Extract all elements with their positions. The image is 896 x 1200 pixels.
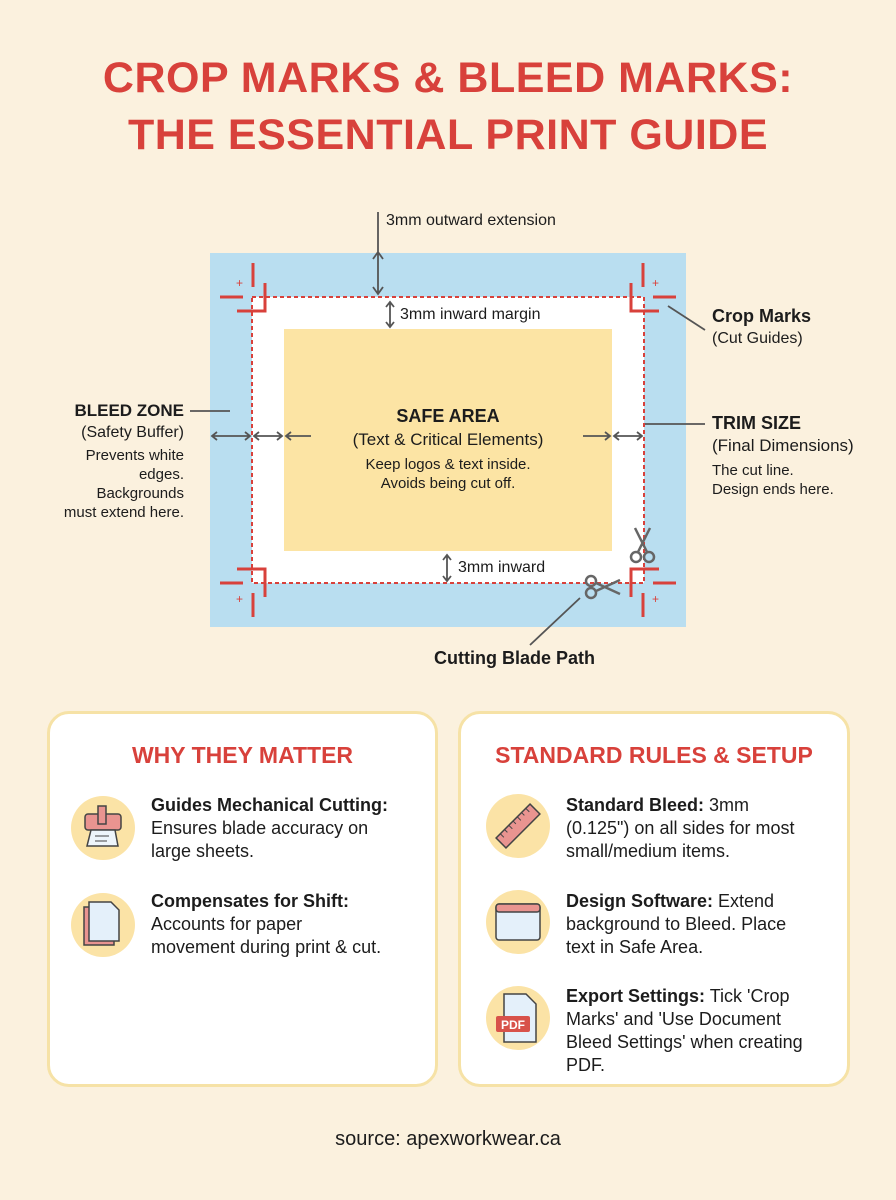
label: trim size: The cut line. xyxy=(712,462,794,479)
label: crop marks: Crop Marks xyxy=(712,306,811,326)
text: compensates for shift: movement during print & cut. xyxy=(151,937,381,957)
label: bleed zone: Prevents white xyxy=(86,447,184,464)
text: compensates for shift xyxy=(151,891,381,957)
panel: why they matter xyxy=(47,711,438,1087)
icon: cutter xyxy=(71,796,135,860)
label: trim size: (Final Dimensions) xyxy=(712,436,854,455)
panel: standard rules xyxy=(458,711,850,1087)
bleed zone xyxy=(210,253,686,627)
text: compensates for shift: Compensates for Shift: xyxy=(151,891,349,911)
crop marks xyxy=(220,263,676,617)
title: CROP MARKS & BLEED MARKS: xyxy=(103,54,793,102)
text: design software: Design Software: Extend xyxy=(566,891,774,911)
dimension labels: 3mm outward extension xyxy=(386,212,556,229)
icon: paper xyxy=(71,893,135,957)
icon: ruler xyxy=(486,794,550,858)
safe area: Avoids being cut off. xyxy=(381,475,515,492)
panel: why they matter: WHY THEY MATTER xyxy=(132,742,353,768)
text: design software: text in Safe Area. xyxy=(566,937,703,957)
diagram xyxy=(190,212,706,646)
label: trim size: Design ends here. xyxy=(712,481,834,498)
text: standard bleed: (0.125") on all sides for most xyxy=(566,818,794,838)
label: trim size: TRIM SIZE xyxy=(712,413,801,433)
icon: scissors xyxy=(586,528,654,598)
text: standard bleed: Standard Bleed: 3mm xyxy=(566,795,749,815)
safe area: (Text & Critical Elements) xyxy=(353,430,543,449)
text: guides mechanical cutting: Guides Mechanical Cutting: xyxy=(151,795,388,815)
label: bleed zone: (Safety Buffer) xyxy=(81,424,184,441)
label: cutting blade path: Cutting Blade Path xyxy=(434,648,595,668)
diagram: + xyxy=(236,276,243,290)
arrows xyxy=(190,212,705,645)
safe area xyxy=(284,329,612,551)
text: guides mechanical cutting xyxy=(151,795,388,861)
safe area: SAFE AREA xyxy=(396,406,500,426)
label: bleed zone: Backgrounds xyxy=(96,485,184,502)
diagram: 3mm inward xyxy=(458,559,545,576)
diagram: 3mm inward margin xyxy=(400,306,540,323)
source: source: apexworkwear.ca xyxy=(335,1128,561,1150)
text: standard bleed: small/medium items. xyxy=(566,841,730,861)
icon: pdf: PDF xyxy=(501,1018,525,1032)
safe area: Keep logos & text inside. xyxy=(365,456,531,473)
label: trim size xyxy=(712,413,854,498)
title: THE ESSENTIAL PRINT GUIDE xyxy=(128,111,768,159)
diagram: + xyxy=(236,592,243,606)
diagram: + xyxy=(652,592,659,606)
label: bleed zone: must extend here. xyxy=(64,504,184,521)
title xyxy=(103,54,793,159)
text: export settings: PDF. xyxy=(566,1055,605,1075)
text: export settings: Bleed Settings' when creating xyxy=(566,1032,803,1052)
text: export settings xyxy=(566,986,803,1075)
text: design software: background to Bleed. Place xyxy=(566,914,786,934)
text: standard bleed xyxy=(566,795,794,861)
label: crop marks xyxy=(712,306,811,347)
icon: pdf xyxy=(486,986,550,1050)
label: bleed zone: BLEED ZONE xyxy=(74,401,184,420)
text: compensates for shift: Accounts for paper xyxy=(151,914,302,934)
trim area xyxy=(252,297,644,583)
label: bleed zone: edges. xyxy=(139,466,184,483)
text: guides mechanical cutting: large sheets. xyxy=(151,841,254,861)
text: guides mechanical cutting: Ensures blade accuracy on xyxy=(151,818,368,838)
label: bleed zone xyxy=(64,401,184,521)
text: export settings: Marks' and 'Use Document xyxy=(566,1009,781,1029)
label: crop marks: (Cut Guides) xyxy=(712,330,803,347)
icon: window xyxy=(486,890,550,954)
text: export settings: Export Settings: Tick 'Crop xyxy=(566,986,789,1006)
panel: standard rules: STANDARD RULES & SETUP xyxy=(495,742,813,768)
text: design software xyxy=(566,891,786,957)
diagram: + xyxy=(652,276,659,290)
